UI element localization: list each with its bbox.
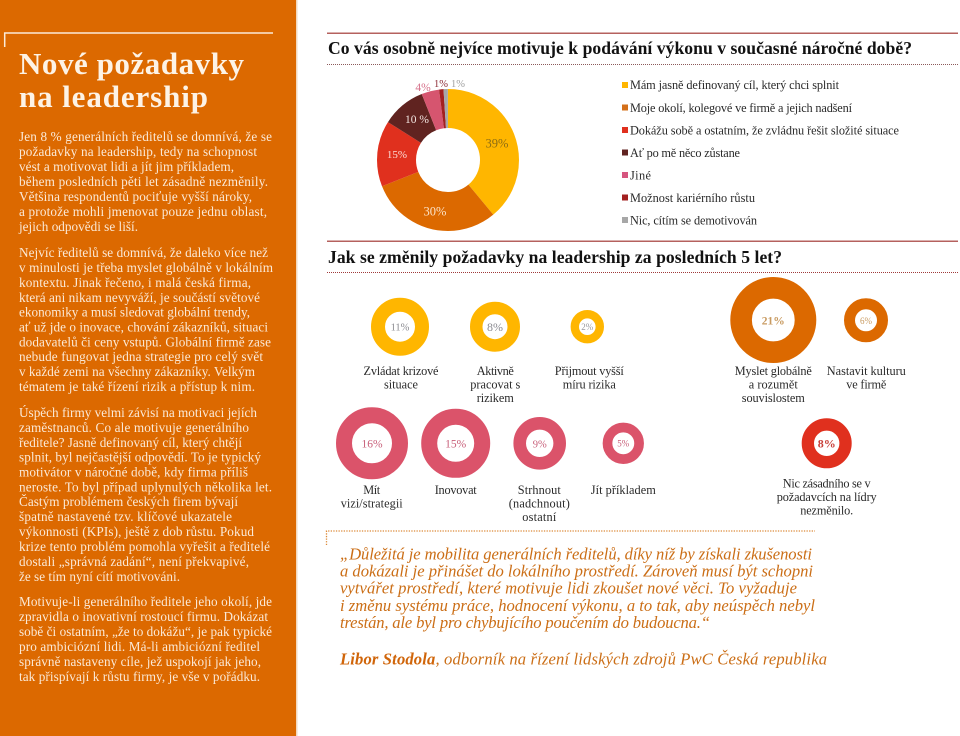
- bubble: vision and strategy 16%: vizi/strategii: [341, 497, 403, 511]
- bubble: working with risk 8%: pracovat s: [470, 378, 521, 392]
- panel: left orange sidebar: [0, 0, 298, 736]
- callout: quote by Libor Stodola: a dokázali je přinášet do lokálního prostředí. Zároveň musí být schopni: [340, 562, 813, 580]
- bubble: nothing changed 8%: [777, 424, 878, 518]
- text block: global thinking paragraph: ať už jde o inovace, chování zákazníků, situaci: [19, 320, 268, 334]
- bubble: vision and strategy 16%: [341, 415, 403, 511]
- text block: motivation paragraph: Častým problémem českých firem bývají: [19, 494, 238, 509]
- bubble: inspire others 9%: 9%: [533, 440, 547, 450]
- text block: ambition paragraph: Motivuje-li generálního ředitele jeho okolí, jde: [19, 594, 272, 609]
- text block: motivation paragraph: krize tento problém pomohla vyřešit a ředitelé: [19, 539, 270, 554]
- callout: quote by Libor Stodola: i změnu systému práce, hodnocení výkonu, a to tak, aby neúspěch nebyl: [340, 596, 815, 615]
- bubble: inspire others 9%: Strhnout: [518, 483, 561, 497]
- text block: intro paragraph: vést a motivovat lidi a jít jim příkladem,: [19, 159, 234, 174]
- bubble: innovation 15%: 15%: [445, 438, 467, 450]
- bubble: inspire others 9%: (nadchnout): [509, 497, 570, 511]
- chart: motivation donut: 4%: [415, 82, 431, 94]
- bubble: vision and strategy 16%: 16%: [361, 438, 383, 450]
- title: [19, 46, 244, 114]
- text block: motivation paragraph: [19, 405, 272, 584]
- bubble: company culture 6%: ve firmě: [846, 378, 887, 392]
- callout: quote by Libor Stodola: vytvářet prostředí, které motivuje lidi zkoušet nové věci. To vyžaduje: [340, 578, 797, 598]
- bubble: higher risk 2%: Přijmout vyšší: [555, 364, 624, 378]
- text block: global thinking paragraph: Nejvíc ředitelů se domnívá, že daleko více než: [19, 245, 268, 260]
- legend: motivation categories: Jiné: [630, 168, 652, 182]
- callout: quote by Libor Stodola: [326, 531, 827, 668]
- callout: quote by Libor Stodola: trestán, ale byl pro chybujícího poučením do budoucna.“: [340, 613, 710, 632]
- text block: intro paragraph: [18, 129, 272, 234]
- legend: motivation categories: Mám jasně definovaný cíl, který chci splnit: [630, 78, 840, 92]
- text block: ambition paragraph: pro ambiciózní lidi. Má-li ambiciózní ředitel: [19, 639, 260, 654]
- bubble: higher risk 2%: 2%: [581, 322, 594, 332]
- title: Nové požadavky: [19, 46, 244, 81]
- bubble: vision and strategy 16%: Mít: [363, 483, 381, 497]
- legend: motivation categories: Moje okolí, kolegové ve firmě a jejich nadšení: [630, 101, 853, 115]
- bubble: company culture 6%: 6%: [860, 316, 872, 326]
- bubble: innovation 15%: [429, 417, 482, 497]
- text block: global thinking paragraph: ekonomiky a musí sledovat globální trendy,: [19, 304, 250, 320]
- bubble: global thinking 21%: Myslet globálně: [735, 364, 812, 378]
- bubble: lead by example 5%: Jít příkladem: [591, 483, 656, 497]
- text block: motivation paragraph: dostali „správná zadání“, není překvapivé,: [19, 554, 249, 569]
- bubble: company culture 6%: Nastavit kulturu: [827, 364, 906, 378]
- title: na leadership: [19, 79, 208, 114]
- text block: motivation paragraph: ředitele? Jasně definovaný cíl, který chtějí: [19, 435, 242, 450]
- legend: motivation categories: Možnost kariérního růstu: [630, 191, 755, 205]
- text block: global thinking paragraph: nebude fungovat jedna strategie pro celý svět: [19, 349, 263, 364]
- bubble: inspire others 9%: [509, 423, 570, 524]
- text block: motivation paragraph: výkonnosti (KPIs), ještě z dob růstu. Pokud: [19, 524, 254, 539]
- text block: global thinking paragraph: [19, 245, 274, 394]
- chart: motivation donut: 15%: [387, 149, 407, 161]
- text block: global thinking paragraph: dodavatelů či ceny vstupů. Globální firmě zase: [19, 334, 271, 350]
- text block: intro paragraph: požadavky na leadership, tedy na schopnost: [19, 144, 257, 159]
- text block: intro paragraph: jejich odpovědi se liší.: [18, 219, 138, 234]
- bubble: working with risk 8%: rizikem: [477, 391, 514, 405]
- text block: global thinking paragraph: v každé zemi na všechny zákazníky. Velkým: [19, 364, 256, 379]
- bubble: working with risk 8%: Aktivně: [477, 364, 514, 378]
- text block: motivation paragraph: špatně nastavené tzv. klíčové ukazatele: [19, 509, 232, 524]
- text block: intro paragraph: během posledních pěti let zásadně nezměnily.: [19, 174, 268, 189]
- bubble: crisis management 11%: [364, 305, 439, 392]
- bubble: crisis management 11%: Zvládat krizové: [364, 364, 439, 378]
- bubble: lead by example 5%: [591, 428, 656, 497]
- bubble: innovation 15%: Inovovat: [435, 483, 477, 497]
- text block: motivation paragraph: Úspěch firmy velmi závisí na motivaci jejích: [19, 405, 257, 420]
- bubble: nothing changed 8%: požadavcích na lídry: [777, 490, 878, 504]
- text block: ambition paragraph: správně nastaveny cíle, jež uspokojí jak jeho,: [19, 654, 261, 669]
- bubble: crisis management 11%: situace: [384, 378, 419, 392]
- text block: global thinking paragraph: která ani nikam nevyváží, je součástí světové: [19, 290, 260, 305]
- text block: intro paragraph: a protože mohli jmenovat pouze jednu oblast,: [19, 204, 267, 219]
- bubble: global thinking 21%: 21%: [762, 316, 785, 328]
- bubble: higher risk 2%: [555, 314, 624, 392]
- callout: quote by Libor Stodola: Libor Stodola, odborník na řízení lidských zdrojů PwC Česká republika: [339, 650, 827, 668]
- text block: motivation paragraph: neroste. To byl případ uplynulých několika let.: [19, 480, 272, 494]
- bubble: lead by example 5%: 5%: [617, 438, 630, 448]
- text block: global thinking paragraph: v minulosti je třeba myslet globálně v lokálním: [19, 260, 274, 275]
- text block: ambition paragraph: sobě či ostatním, „že to dokážu“, je pak typické: [19, 624, 272, 639]
- legend: motivation categories: Dokážu sobě a ostatním, že zvládnu řešit složité situace: [630, 124, 900, 138]
- bubble: company culture 6%: [827, 304, 906, 392]
- callout: quote by Libor Stodola: „Důležitá je mobilita generálních ředitelů, díky níž by získali zkušenosti: [340, 544, 812, 563]
- legend: motivation categories: Nic, cítím se demotivován: [630, 214, 757, 228]
- chart: motivation donut: 1%: [451, 79, 465, 90]
- bubble: working with risk 8%: [470, 308, 521, 405]
- bubble: higher risk 2%: míru rizika: [563, 378, 616, 392]
- bubble: crisis management 11%: 11%: [391, 322, 410, 334]
- legend: motivation categories: [622, 78, 900, 228]
- text block: ambition paragraph: zpravidla o inovativní rostoucí firmu. Dokázat: [19, 609, 268, 624]
- bubble: global thinking 21%: [735, 288, 812, 405]
- text block: motivation paragraph: motivátor v náročné době, kdy firma příliš: [19, 464, 248, 480]
- bubble: inspire others 9%: ostatní: [522, 510, 557, 524]
- text block: motivation paragraph: že se tím nyní cítí motivováni.: [19, 569, 180, 584]
- text block: global thinking paragraph: tématem je také řízení rizik a přístup k nim.: [19, 379, 255, 394]
- heading: leadership change question: Jak se změnily požadavky na leadership za posledních 5 let?: [328, 247, 782, 267]
- legend: motivation categories: Ať po mě něco zůstane: [630, 146, 741, 160]
- chart: motivation donut: 1%: [434, 79, 448, 90]
- bubble: global thinking 21%: a rozumět: [749, 378, 798, 392]
- bubble: working with risk 8%: 8%: [487, 320, 503, 334]
- chart: motivation donut: 30%: [424, 204, 446, 218]
- bubble: nothing changed 8%: nezměnilo.: [800, 504, 853, 518]
- chart: motivation donut: 10 %: [405, 114, 429, 126]
- heading: motivation question: Co vás osobně nejvíce motivuje k podávání výkonu v současné náročné době?: [328, 38, 912, 58]
- text block: global thinking paragraph: kontextu. Jinak řečeno, i malá česká firma,: [19, 275, 251, 290]
- text block: intro paragraph: Jen 8 % generálních ředitelů se domnívá, že se: [19, 129, 272, 144]
- text block: intro paragraph: Většina respondentů pociťuje vyšší nároky,: [19, 189, 252, 204]
- chart: motivation donut: 39%: [486, 136, 508, 150]
- text block: motivation paragraph: splnit, byl nejčastější odpovědí. To je typický: [19, 450, 261, 464]
- text block: ambition paragraph: tak přispívají k růstu firmy, je vše v pořádku.: [19, 669, 260, 684]
- chart: motivation donut: [387, 79, 508, 218]
- bubble: global thinking 21%: souvislostem: [742, 391, 805, 405]
- text block: motivation paragraph: zaměstnanců. Co ale motivuje generálního: [19, 420, 249, 435]
- bubble: nothing changed 8%: Nic zásadního se v: [783, 477, 872, 491]
- bubble: nothing changed 8%: 8%: [818, 436, 836, 450]
- text block: ambition paragraph: [19, 594, 272, 684]
